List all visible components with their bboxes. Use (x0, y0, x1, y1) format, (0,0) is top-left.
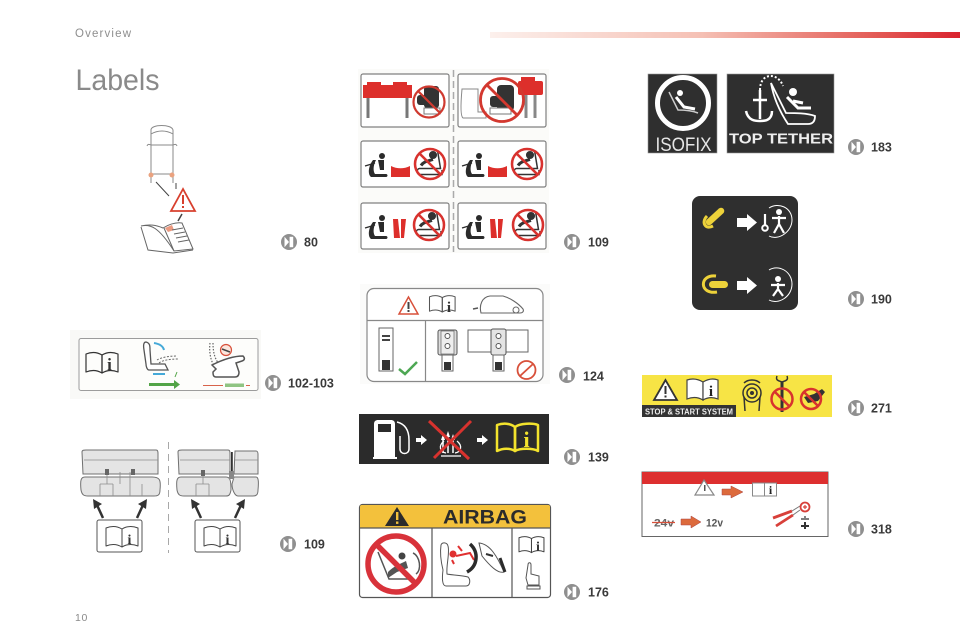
left bench (81, 450, 160, 496)
page ref 190 (848, 291, 892, 307)
page ref 176 (564, 584, 609, 600)
label: van warning and book (141, 126, 195, 253)
top left cell (363, 85, 412, 98)
page ref 109 middle: 109 (588, 236, 609, 250)
page ref 80: 80 (304, 236, 318, 250)
label: battery: i (769, 483, 773, 497)
no tool (777, 376, 787, 382)
page ref 271: 271 (871, 402, 892, 416)
page ref 139 (564, 449, 609, 465)
middle connector (438, 330, 457, 355)
label: airbag: i (536, 540, 540, 555)
tick (399, 362, 417, 374)
airbag seat diagram (441, 543, 470, 586)
TOP TETHER text: TOP TETHER (729, 132, 834, 148)
page ref 318: 318 (871, 522, 892, 536)
12v: 12v (706, 518, 724, 530)
clamp and poles (773, 511, 793, 526)
label: rear seats with book: i (128, 533, 132, 548)
page ref 271 (848, 400, 892, 416)
label: stop and start (642, 375, 832, 417)
row 2 cells (365, 153, 388, 177)
belt wheel (743, 384, 761, 402)
label: stop and start: STOP & START SYSTEM (645, 408, 733, 416)
label: battery (642, 472, 828, 536)
label: TOP TETHER (727, 74, 834, 153)
page ref 109 left: 109 (304, 538, 325, 552)
top right cell (461, 89, 486, 118)
label: ISOFIX (648, 74, 717, 156)
no hand (804, 389, 825, 403)
row 3 cells (365, 215, 388, 239)
label: rear seats with book: i (226, 533, 230, 548)
book boxes (97, 520, 142, 552)
label: seat with book (70, 330, 261, 399)
label: airbag seat positions grid (358, 69, 549, 253)
label: seat with book: i (107, 355, 112, 374)
page ref 109 left (280, 536, 325, 552)
right bench (177, 450, 258, 496)
page ref 80 (281, 234, 318, 250)
right connector (468, 330, 528, 352)
label: stop and start: i (709, 384, 713, 400)
page ref 318 (848, 521, 892, 537)
warning triangle (385, 507, 409, 526)
page ref 183 (848, 139, 892, 155)
lower lever (709, 281, 728, 288)
label: fuel warning (359, 414, 549, 464)
title: Labels: Labels (76, 64, 160, 97)
header gradient bar (490, 32, 960, 38)
page ref 124: 124 (583, 370, 604, 384)
label: roof bar warning: i (447, 300, 451, 316)
stop start banner (642, 405, 736, 417)
heading: AIRBAG: AIRBAG (443, 508, 527, 528)
label: rear seats with book (81, 442, 258, 553)
section header: Overview: Overview (75, 28, 132, 40)
left connector (379, 328, 393, 371)
page ref 102-103: 102-103 (288, 376, 334, 390)
label: airbag (360, 504, 550, 598)
dashed divider (168, 442, 170, 553)
prohibition (518, 361, 536, 379)
page number: 10 (75, 612, 88, 624)
page ref 139: 139 (588, 450, 609, 464)
page ref 190: 190 (871, 292, 892, 306)
label: child lock (692, 196, 798, 310)
ISOFIX text: ISOFIX (656, 135, 712, 156)
page ref 109 middle (564, 234, 609, 250)
page ref 124 (559, 367, 604, 384)
prohibited child seat (378, 552, 410, 579)
label: fuel warning: i (523, 427, 530, 452)
arrows (97, 505, 241, 518)
page ref 183: 183 (871, 140, 892, 154)
24v struck: 24v (654, 518, 675, 530)
label: roof bar warning (360, 284, 550, 384)
page ref 176: 176 (588, 586, 609, 600)
page ref 102-103 (265, 375, 334, 391)
book and hand (519, 537, 544, 553)
